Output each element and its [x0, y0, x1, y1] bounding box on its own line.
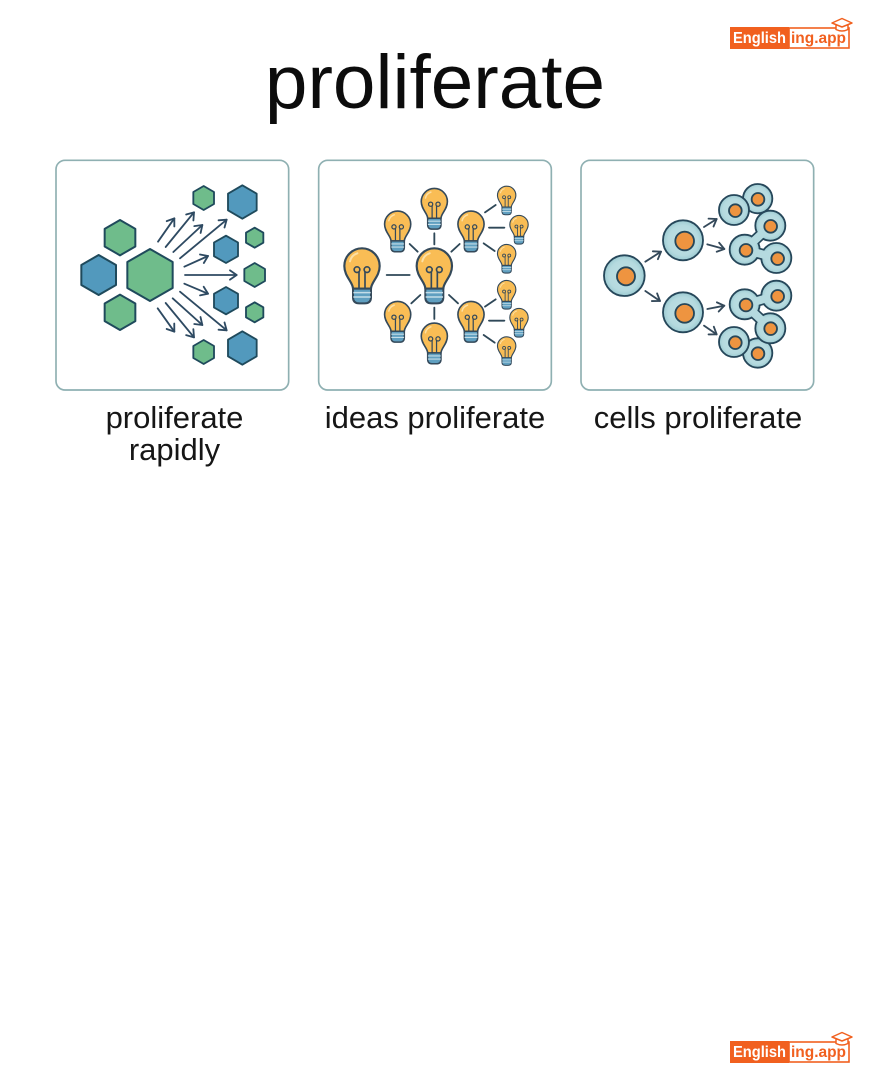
logo: top right: English: [733, 30, 786, 47]
panel: cells proliferate: [580, 160, 814, 391]
label: proliferate rapidly: [106, 400, 243, 467]
illustration: dividing cells: [580, 160, 814, 391]
label: cells proliferate: cells proliferate: [594, 400, 802, 435]
label: ideas proliferate: ideas proliferate: [325, 400, 545, 435]
large cells: [604, 220, 703, 332]
connecting lines: [387, 205, 504, 343]
title: proliferate: [265, 40, 605, 125]
panel: ideas proliferate: [318, 160, 552, 391]
panel: proliferate rapidly: [55, 160, 290, 391]
label: proliferate rapidly: proliferate: [106, 400, 243, 435]
upper cell cluster: [719, 184, 791, 273]
resulting hexagons: [193, 185, 265, 365]
logo: top right: ing.app: [791, 30, 846, 47]
lower cell cluster: [719, 281, 791, 368]
arrows spreading outward: [158, 212, 237, 337]
logo: top right: [730, 18, 853, 49]
illustration: hexagons multiplying: [55, 160, 290, 391]
arrows between generations: [645, 219, 724, 334]
label: proliferate rapidly: rapidly: [129, 432, 220, 467]
illustration: network of light bulbs: [318, 160, 552, 391]
logo: bottom right: ing.app: [791, 1044, 846, 1061]
logo: bottom right: English: [733, 1044, 786, 1061]
logo: bottom right: [730, 1032, 853, 1063]
source hexagons: [81, 220, 173, 330]
light bulbs: [344, 186, 528, 365]
